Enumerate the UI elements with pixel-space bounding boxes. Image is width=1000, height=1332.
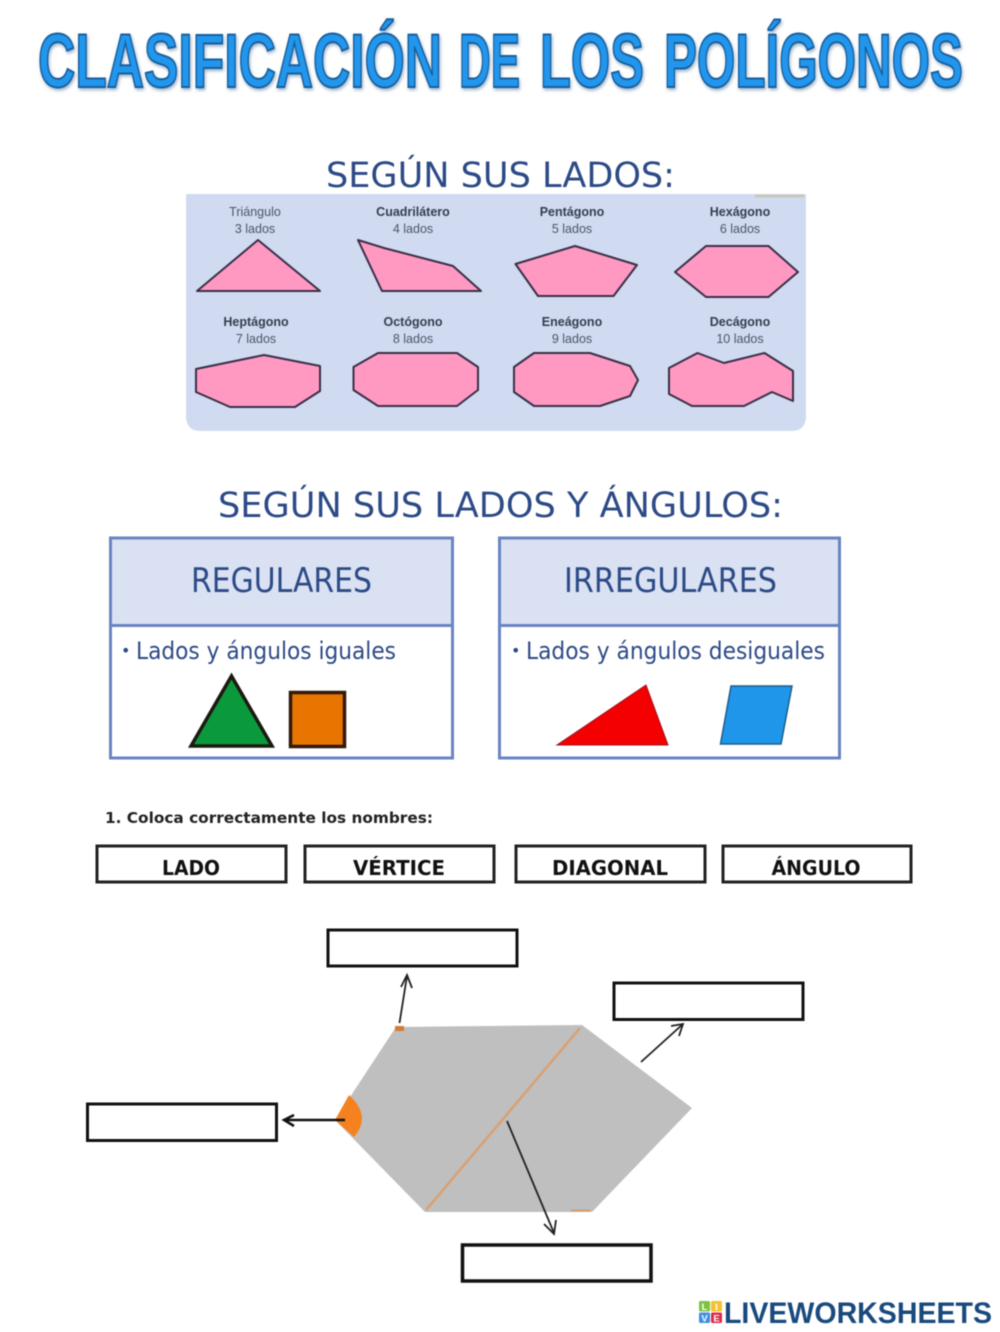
diagram: hexagon with parts — [335, 1025, 692, 1212]
hexagon: Hexágono — [710, 205, 771, 219]
enneagon: 9 lados — [552, 332, 592, 346]
heptagon: Heptágono — [223, 315, 289, 329]
enneagon: Eneágono — [542, 315, 603, 329]
quadrilateral — [358, 205, 481, 291]
answer box: right — [614, 983, 803, 1020]
quadrilateral: 4 lados — [393, 222, 433, 236]
logo: liveworksheets: I — [715, 1302, 718, 1313]
decagon — [669, 315, 793, 406]
pentagon: 5 lados — [552, 222, 592, 236]
word bank: vértice — [305, 846, 494, 882]
vertex mark — [395, 1026, 404, 1031]
answer box: top — [328, 930, 517, 966]
decagon: Decágono — [710, 315, 771, 329]
octagon: Octógono — [383, 315, 443, 329]
arrow: to right box — [641, 1024, 683, 1062]
decagon: 10 lados — [716, 332, 764, 346]
logo: liveworksheets: L — [702, 1302, 708, 1313]
arrow: to bottom box — [507, 1121, 556, 1234]
hexagon — [675, 205, 798, 297]
heptagon: 7 lados — [236, 332, 276, 346]
icon: red triangle — [557, 685, 668, 745]
answer box: bottom — [462, 1245, 651, 1281]
title: LOS — [540, 19, 644, 104]
triangle: Triángulo — [229, 205, 281, 219]
word bank: ángulo — [723, 846, 911, 882]
hexagon: 6 lados — [720, 222, 760, 236]
heading: irregulares: IRREGULARES — [564, 561, 777, 601]
heptagon — [196, 315, 320, 407]
arrow: to top box — [400, 975, 412, 1023]
title — [38, 19, 963, 104]
text: regular description: Lados y ángulos iguales — [136, 637, 396, 665]
triangle — [197, 205, 320, 291]
logo: liveworksheets: LIVEWORKSHEETS — [724, 1297, 992, 1330]
pentagon: Pentágono — [540, 205, 605, 219]
word bank: ángulo: ÁNGULO — [772, 856, 860, 880]
logo: liveworksheets: V — [701, 1314, 708, 1324]
panel: polygons by number of sides — [186, 194, 806, 431]
heading: según sus lados: SEGÚN SUS LADOS: — [326, 154, 675, 196]
text: irregular description: Lados y ángulos desiguales — [526, 637, 825, 665]
angle wedge — [335, 1095, 362, 1137]
arrow: to left box — [284, 1115, 345, 1126]
word bank: diagonal — [516, 846, 705, 882]
pentagon — [516, 205, 637, 296]
logo: liveworksheets: E — [713, 1314, 720, 1324]
enneagon — [514, 315, 638, 406]
text: irregular description: • — [511, 641, 520, 660]
icon: green triangle — [191, 676, 272, 746]
instruction text: 1. Coloca correctamente los nombres: — [105, 809, 433, 827]
triangle: 3 lados — [235, 222, 275, 236]
answer box: left — [88, 1104, 276, 1140]
panel: irregulares — [499, 538, 841, 758]
title: CLASIFICACIÓN — [38, 19, 442, 104]
title: DE — [459, 19, 520, 104]
octagon — [354, 315, 478, 406]
word bank: lado — [97, 846, 286, 882]
heading: regulares: REGULARES — [191, 561, 372, 601]
icon: orange square — [290, 692, 344, 746]
diagonal line — [426, 1028, 580, 1210]
word bank: diagonal: DIAGONAL — [552, 856, 668, 880]
octagon: 8 lados — [393, 332, 433, 346]
word bank: lado: LADO — [162, 856, 220, 880]
side mark — [571, 1210, 590, 1212]
word bank: vértice: VÉRTICE — [353, 856, 445, 880]
heading: según sus lados y ángulos: SEGÚN SUS LADOS Y ÁNGULOS: — [218, 484, 783, 526]
quadrilateral: Cuadrilátero — [376, 205, 450, 219]
panel: regulares — [110, 538, 453, 758]
icon: blue parallelogram — [720, 686, 792, 744]
text: regular description: • — [121, 641, 130, 660]
